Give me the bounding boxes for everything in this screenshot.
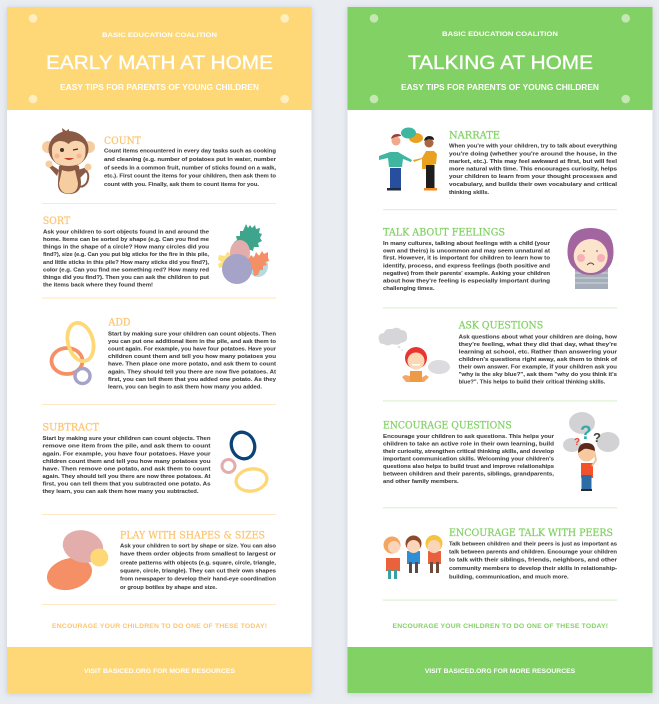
section: encourage talk with peers: Talk between children and their peers is just as important as [449, 542, 618, 548]
section: subtract: they learn, you can ask them how many you subtracted. [42, 489, 199, 495]
section: ask questions: "why is the sky blue?", ask them "why do you think it's [459, 372, 618, 378]
section: sort: SORT [43, 216, 71, 227]
call to action: talking: ENCOURAGE YOUR CHILDREN TO DO ONE OF THESE TODAY! [392, 623, 608, 630]
section: sort: Ask your children to sort objects found in and around the [43, 230, 210, 236]
header band: talking: BASIC EDUCATION COALITION [442, 31, 558, 38]
section: ask questions: learning at school, etc. Rather than answering your [459, 350, 618, 356]
section: sort: find?), size (e.g. Can you put big sticks for the fire in this pile, [43, 252, 209, 258]
section: count: etc.). First count the items for your children, then ask them to [104, 174, 276, 180]
section: play with shapes and sizes: from newspaper to develop their hand-eye coordination [120, 577, 276, 583]
section: ask questions: blue?". This helps to build their critical thinking skills. [459, 380, 606, 386]
section: encourage questions: ENCOURAGE QUESTIONS [383, 421, 512, 432]
footer band: early math: VISIT BASICED.ORG FOR MORE RESOURCES [84, 668, 235, 675]
section: encourage talk with peers: ENCOURAGE TALK WITH PEERS [449, 528, 613, 539]
section: encourage talk with peers: community members to develop their skills in relationship- [449, 566, 617, 572]
section: add: children count them and tell you how many potatoes you [108, 354, 276, 360]
section: add: Start by making sure your children can count objects. Then [108, 332, 276, 338]
section: add [108, 318, 277, 391]
header band: early math [7, 7, 312, 110]
icon: girl in purple hijab [568, 228, 614, 289]
section: narrate: more natural with time. This encourages curiosity, helps [449, 167, 618, 173]
header band: talking: EASY TIPS FOR PARENTS OF YOUNG CHILDREN [401, 83, 599, 92]
section: subtract: again. They should tell you there are now three potatoes. At [42, 474, 211, 480]
section: ask questions: children's questions right away, ask them to think of [459, 357, 617, 363]
section: talk about feelings: first. However, it is important for children to learn how to [383, 256, 550, 262]
icon: thinking boy with bubbles [379, 328, 450, 382]
section: subtract: first, you can tell them that you subtracted one potato. As [42, 482, 211, 488]
section: sort: things in the shape of a circle? How many circles did you [43, 245, 209, 251]
icon: three rings (subtract) [222, 429, 269, 494]
section: sort [43, 216, 210, 289]
section: encourage talk with peers: building, communication, and much more. [449, 575, 569, 581]
section: narrate: thinking skills. [449, 190, 489, 196]
footer band: talking: VISIT BASICED.ORG FOR MORE RESOURCES [425, 668, 576, 675]
section: talk about feelings [383, 228, 551, 292]
icon: two people talking [379, 128, 437, 190]
section: encourage questions: important communication skills. Welcoming your children's [383, 457, 555, 463]
section: encourage questions: children to take an active role in their own learning, build [383, 442, 554, 448]
icon: boy with question marks [563, 412, 620, 491]
section: narrate [449, 131, 618, 196]
panel: talking at home [348, 7, 652, 693]
section: talk about feelings: negative) from their parents' example. Asking your children [383, 271, 550, 277]
section: narrate: vocabulary, and builds their own vocabulary and critical [449, 182, 617, 188]
section: play with shapes and sizes: or group bottles by shape and size. [120, 585, 217, 591]
section: encourage talk with peers: talk between parents and children. Encourage your children [449, 550, 617, 556]
section: talk about feelings: identify, process, and express feelings (both positive and [383, 264, 550, 270]
section: add: again. They should tell you there are now five potatoes. At [108, 369, 276, 375]
header band: early math: EASY TIPS FOR PARENTS OF YOUNG CHILDREN [60, 83, 259, 92]
section: subtract: have. Then remove one potato, and ask them to count [42, 467, 211, 473]
section: encourage questions: Encourage your children to ask questions. This helps your [383, 434, 555, 440]
section: play with shapes and sizes: PLAY WITH SHAPES & SIZES [120, 531, 265, 542]
section: ask questions [458, 321, 618, 386]
section: add: have. Then place one more potato, and ask them to count [108, 362, 276, 368]
section: add: you can put one additional item in the pile, and ask them to [108, 339, 276, 345]
section: play with shapes and sizes: create patterns with objects (e.g. square, circle, triangle, [120, 560, 276, 566]
section: subtract: children count them and tell you how many potatoes you [42, 459, 211, 465]
footer band: early math [7, 647, 312, 693]
icon: three children [384, 535, 442, 579]
section: count: of seeds in a common fruit, number of sticks found on a walk, [104, 165, 276, 171]
section: encourage talk with peers: to talk with their siblings, friends, neighbors, and other [449, 558, 618, 564]
section: sort: the items back where they found them! [43, 283, 153, 289]
section: add: learn, you can begin to ask them how many you added. [108, 385, 262, 391]
section: subtract: remove one item from the pile, and ask them to count [42, 444, 211, 450]
section: add: count again. For example, you have four potatoes. Have your [108, 347, 277, 353]
icon: three rings (add) [52, 320, 98, 384]
section: sort: and little sticks in this pile? How many sticks did you find?), [43, 260, 209, 266]
panel: early math at home [7, 7, 312, 693]
section: count: and cleaning (e.g. number of potatoes put in water, number [104, 157, 277, 163]
icon: boy with question marks: ? [574, 437, 580, 448]
header band: early math: EARLY MATH AT HOME [46, 52, 273, 74]
section: encourage talk with peers [449, 528, 618, 581]
section: subtract: again. For example, you have four potatoes. Have your [42, 451, 211, 457]
section: talk about feelings: TALK ABOUT FEELINGS [383, 228, 505, 239]
icon: solid blobs [43, 526, 108, 595]
section: talk about feelings: challenging times. [383, 286, 435, 292]
section: add: first, you can tell them that you added one potato. As they [108, 377, 277, 383]
section: count [104, 136, 277, 188]
section: subtract [42, 423, 211, 495]
icon: boy with question marks: ? [593, 430, 601, 445]
section: play with shapes and sizes: have them order objects from smallest to largest or [120, 552, 277, 558]
section: talk about feelings: own and theirs) is uncommon and may seem unnatural at [383, 248, 550, 254]
section: narrate: market, etc.). This may feel awkward at first, but will feel [449, 159, 617, 165]
section: ask questions: their own answer. For example, if your children ask you [459, 364, 617, 370]
section: encourage questions: their curiosity, strengthen critical thinking skills, and develop [383, 449, 554, 455]
section: count: Count items encountered in every day tasks such as cooking [104, 149, 276, 155]
section: ask questions: ASK QUESTIONS [458, 321, 543, 332]
section: ask questions: they're feeling, what they did that day, what they're [459, 342, 618, 348]
icon: leaves and shapes [218, 224, 269, 284]
header band: talking [348, 7, 652, 110]
icon: boy with question marks: ? [580, 423, 592, 444]
section: play with shapes and sizes: square, circle, triangle). They can cut their own shapes [120, 569, 277, 575]
header band: talking: TALKING AT HOME [408, 52, 593, 74]
footer band: talking [348, 647, 652, 693]
call to action: early math: ENCOURAGE YOUR CHILDREN TO DO ONE OF THESE TODAY! [52, 623, 267, 630]
section: talk about feelings: about how they're feeling is especially important during [383, 279, 550, 285]
section: count: count with you. Finally, ask them to count items for you. [104, 182, 259, 188]
section: encourage questions: questions also helps to build trust and improve relationships [383, 464, 555, 470]
section: ask questions: Ask questions about what your children are doing, how [459, 335, 617, 341]
section: narrate: you're doing (whether you're around the house, in the [449, 152, 618, 158]
section: play with shapes and sizes [120, 531, 277, 591]
section: narrate: When you're with your children, try to talk about everything [449, 144, 617, 150]
section: add: ADD [108, 318, 130, 329]
section: encourage questions [383, 421, 555, 485]
section: subtract: SUBTRACT [42, 423, 99, 434]
section: encourage questions: and other family members. [383, 479, 459, 485]
section: sort: home. Items can be sorted by shape (e.g. Can you find me [43, 237, 210, 243]
section: talk about feelings: In many cultures, talking about feelings with a child (your [383, 241, 551, 247]
section: narrate: NARRATE [449, 131, 500, 142]
section: narrate: your children to learn from your thought processes and [449, 174, 617, 180]
section: count: COUNT [104, 136, 141, 147]
section: encourage questions: between children and their parents, siblings, grandparents, [383, 471, 554, 477]
section: play with shapes and sizes: Ask your children to sort by shape or size. You can also [120, 544, 276, 550]
section: subtract: Start by making sure your children can count objects. Then [42, 436, 211, 442]
header band: early math: BASIC EDUCATION COALITION [102, 32, 217, 39]
icon: monkey [42, 128, 95, 194]
section: sort: color (e.g. Can you find me something red? How many red [43, 268, 209, 274]
section: sort: things did you find?). Then you can ask the children to put [43, 275, 209, 281]
